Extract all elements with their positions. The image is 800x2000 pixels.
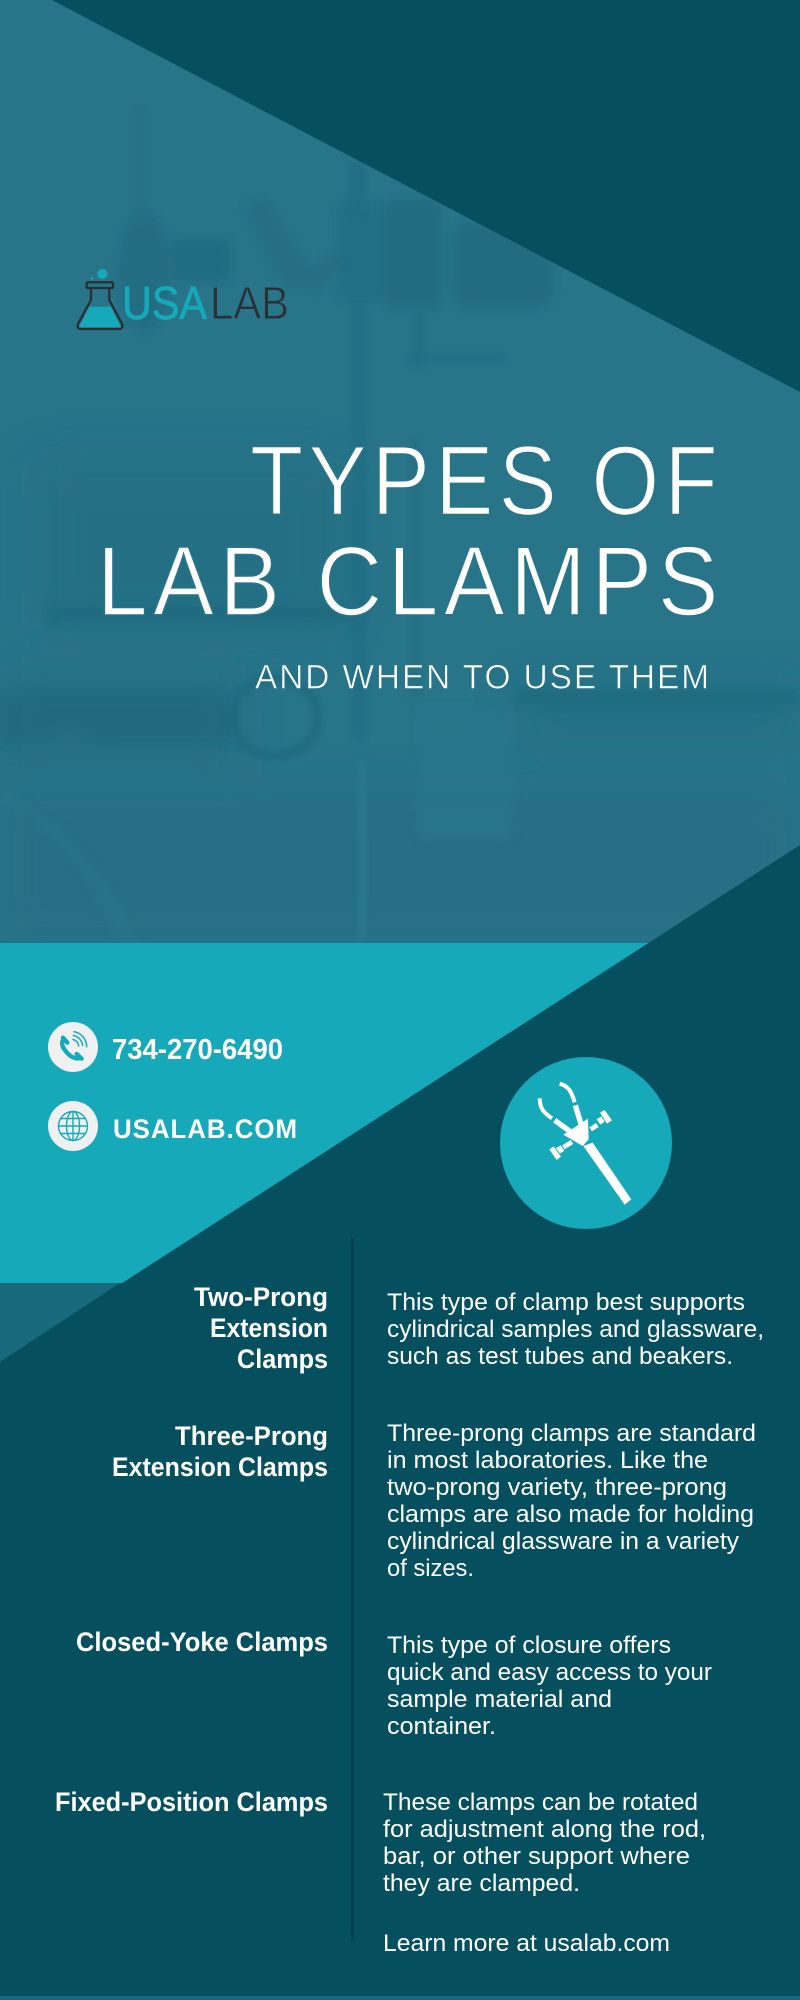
heading: two-prong: Two-Prong — [194, 1282, 328, 1312]
description: three-prong: cylindrical glassware in a variety — [387, 1528, 739, 1555]
logo wordmark USA: USA — [122, 277, 207, 329]
heading: three-prong: Extension Clamps — [112, 1452, 328, 1482]
heading: fixed-position: Fixed-Position Clamps — [55, 1787, 328, 1817]
icon: globe — [48, 1101, 98, 1151]
description: closed-yoke — [387, 1632, 712, 1740]
contact: website — [48, 1101, 298, 1151]
panel: lower-left mid tone triangle — [0, 1283, 120, 1362]
heading: two-prong: Extension — [210, 1313, 328, 1343]
icon: phone — [48, 1022, 98, 1072]
description: two-prong: cylindrical samples and glassware, — [387, 1316, 764, 1343]
logo: USA LAB — [78, 269, 289, 329]
description: closed-yoke: container. — [387, 1713, 496, 1740]
description: three-prong: in most laboratories. Like the — [387, 1447, 708, 1474]
description: closed-yoke: quick and easy access to your — [387, 1659, 712, 1686]
website address: USALAB.COM — [113, 1114, 298, 1144]
description: fixed-position — [383, 1789, 706, 1897]
heading: closed-yoke: Closed-Yoke Clamps — [76, 1627, 328, 1657]
description: closed-yoke: This type of closure offers — [387, 1632, 671, 1659]
row: fixed-position clamps — [55, 1787, 706, 1897]
title: LAB CLAMPS — [97, 526, 724, 636]
heading: three-prong — [112, 1421, 328, 1482]
description: three-prong: two-prong variety, three-prong — [387, 1474, 727, 1501]
subtitle: AND WHEN TO USE THEM — [255, 658, 711, 696]
vertical divider — [351, 1238, 354, 1941]
contact: phone — [48, 1022, 283, 1072]
icon: flask — [78, 269, 122, 329]
description: two-prong: This type of clamp best supports — [387, 1289, 745, 1316]
title — [97, 426, 724, 636]
phone number: 734-270-6490 — [112, 1034, 283, 1066]
description: two-prong: such as test tubes and beakers. — [387, 1343, 733, 1370]
logo wordmark LAB: LAB — [210, 277, 289, 329]
row: three-prong extension clamps — [112, 1420, 756, 1582]
heading: two-prong — [194, 1282, 328, 1374]
panel: dark content area — [0, 845, 800, 1996]
description: fixed-position: These clamps can be rotated — [383, 1789, 698, 1816]
description: two-prong — [387, 1289, 764, 1370]
panel: dark top-right triangle — [52, 0, 800, 392]
heading: two-prong: Clamps — [237, 1344, 328, 1374]
description: three-prong: of sizes. — [387, 1555, 474, 1582]
row: two-prong extension clamps — [194, 1282, 764, 1374]
description: fixed-position: for adjustment along the rod, — [383, 1816, 706, 1843]
row: closed-yoke clamps — [76, 1627, 712, 1740]
call to action: learn more: Learn more at usalab.com — [383, 1930, 670, 1957]
description: fixed-position: bar, or other support where — [383, 1843, 690, 1870]
description: three-prong: clamps are also made for holding — [387, 1501, 754, 1528]
description: fixed-position: they are clamped. — [383, 1870, 580, 1897]
title: TYPES OF — [250, 426, 723, 536]
panel: lab photo background — [0, 0, 800, 943]
bottom strip — [0, 1996, 800, 2000]
panel: teal contact band — [0, 943, 800, 1283]
description: three-prong — [387, 1420, 756, 1582]
description: three-prong: Three-prong clamps are standard — [387, 1420, 756, 1447]
description: closed-yoke: sample material and — [387, 1686, 612, 1713]
heading: three-prong: Three-Prong — [175, 1421, 328, 1451]
icon: lab clamp in teal circle — [500, 1057, 672, 1229]
